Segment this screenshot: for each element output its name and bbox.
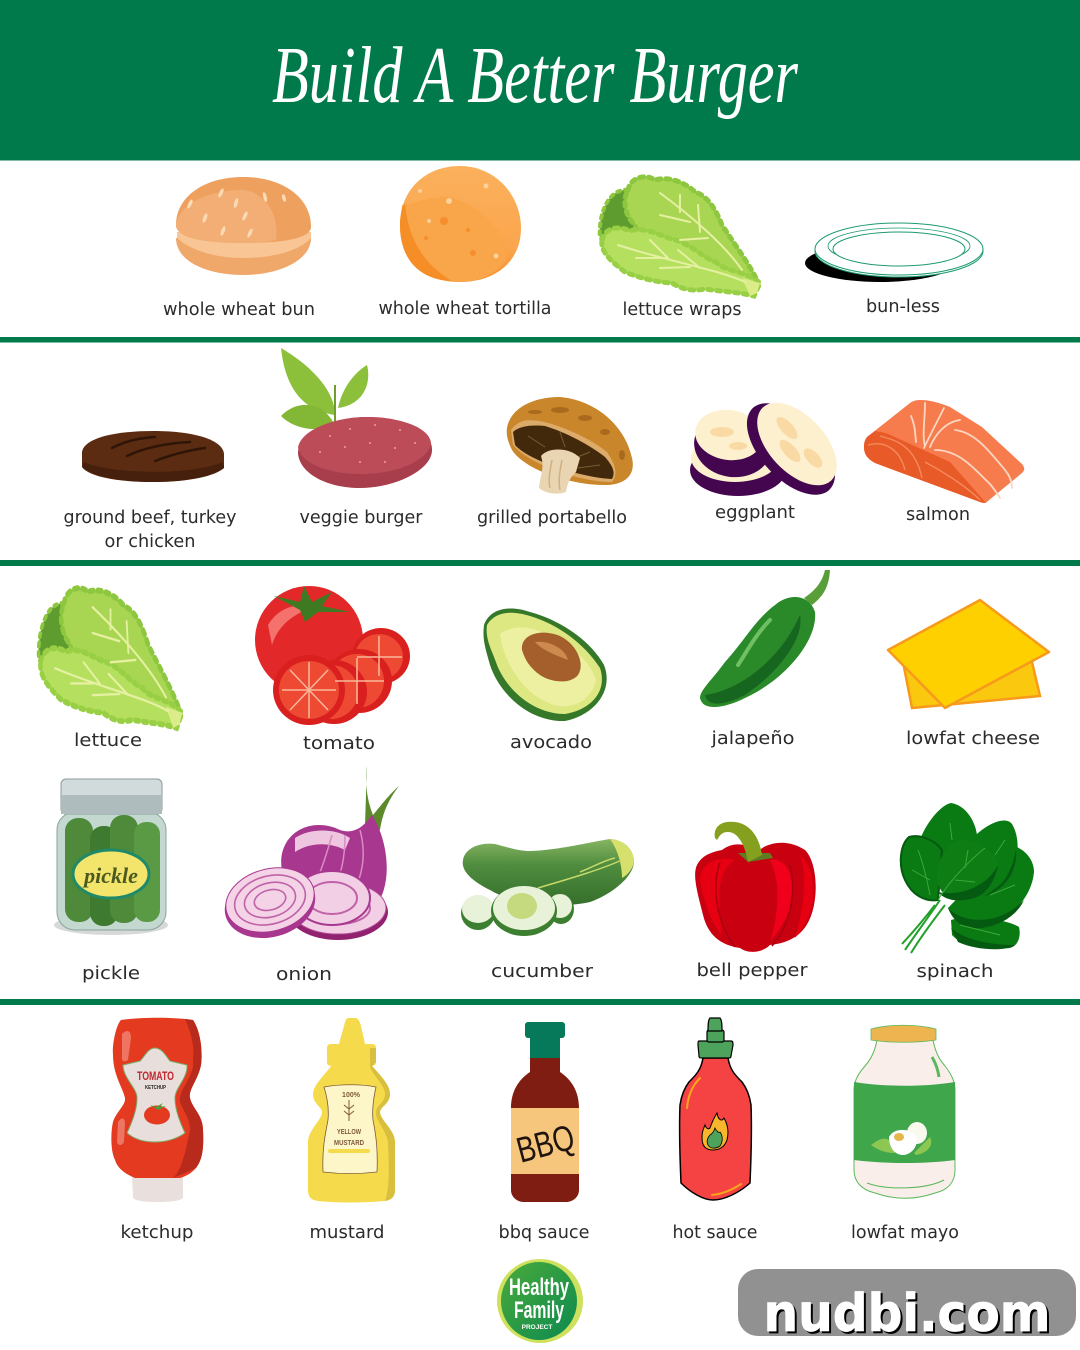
icon: pickle jar: pickle bbox=[82, 863, 138, 888]
section: bun options bbox=[163, 166, 983, 320]
section: toppings bbox=[39, 570, 1049, 985]
label: bun-less: bun-less bbox=[866, 296, 940, 317]
icon: veggie burger bbox=[281, 348, 432, 488]
icon: pickle jar bbox=[54, 779, 168, 935]
label: avocado: avocado bbox=[510, 732, 592, 753]
label: veggie burger: veggie burger bbox=[300, 507, 423, 528]
header banner bbox=[0, 0, 1080, 160]
label: bbq sauce: bbq sauce bbox=[498, 1222, 590, 1243]
icon: bbq sauce bottle bbox=[511, 1022, 579, 1202]
title: Build A Better Burger bbox=[272, 32, 799, 120]
watermark: nudbi.com: nudbi.com bbox=[766, 1286, 1052, 1346]
label: tomato: tomato bbox=[303, 733, 375, 754]
label: lowfat mayo: lowfat mayo bbox=[851, 1222, 959, 1243]
section: sauces bbox=[111, 1018, 959, 1243]
logo: Healthy Family Project: Family bbox=[514, 1297, 564, 1324]
icon: whole wheat bun bbox=[176, 177, 311, 275]
label: grilled portabello: grilled portabello bbox=[477, 507, 627, 528]
icon: spinach bbox=[901, 803, 1034, 953]
icon: lettuce bbox=[39, 588, 182, 728]
icon: lettuce wraps bbox=[600, 177, 760, 296]
section: protein options bbox=[64, 348, 1024, 552]
icon: jalapeno bbox=[700, 570, 830, 707]
icon: plate bbox=[805, 223, 983, 282]
logo: Healthy Family Project: Healthy bbox=[509, 1274, 569, 1301]
icon: onion bbox=[217, 765, 399, 948]
icon: tomato bbox=[255, 586, 410, 725]
label: cucumber: cucumber bbox=[491, 961, 594, 982]
icon: portabello mushroom bbox=[507, 397, 633, 494]
label: hot sauce: hot sauce bbox=[672, 1222, 758, 1243]
label: spinach: spinach bbox=[916, 961, 994, 982]
label: lettuce: lettuce bbox=[74, 730, 142, 751]
icon: salmon fillet bbox=[864, 400, 1024, 503]
label: eggplant: eggplant bbox=[715, 502, 795, 523]
icon: ketchup bottle: KETCHUP bbox=[145, 1085, 166, 1091]
icon: mustard bottle bbox=[308, 1018, 395, 1202]
icon: hot sauce bottle bbox=[680, 1018, 751, 1200]
label: whole wheat bun: whole wheat bun bbox=[163, 299, 315, 320]
label: ground beef, turkey or chicken: ground beef, turkey bbox=[64, 507, 237, 528]
label: pickle: pickle bbox=[82, 963, 140, 984]
icon: mustard bottle: 100% bbox=[342, 1092, 361, 1099]
icon: ketchup bottle: TOMATO bbox=[137, 1071, 174, 1083]
icon: lowfat mayo jar bbox=[854, 1025, 955, 1198]
icon: cucumber bbox=[461, 839, 634, 936]
icon: mustard bottle: YELLOW bbox=[337, 1129, 361, 1136]
label: ketchup: ketchup bbox=[120, 1222, 194, 1243]
icon: avocado bbox=[483, 608, 607, 721]
label: jalapeno: jalapeño bbox=[710, 728, 794, 749]
label: lowfat cheese: lowfat cheese bbox=[906, 728, 1040, 749]
label: ground beef, turkey or chicken: or chicken bbox=[104, 531, 196, 552]
icon: ketchup bottle bbox=[111, 1018, 203, 1202]
icon: lowfat cheese bbox=[888, 600, 1049, 708]
watermark: nudbi.com: nudbi.com bbox=[764, 1284, 1050, 1344]
label: mustard: mustard bbox=[310, 1222, 384, 1243]
logo: Healthy Family Project: PROJECT bbox=[522, 1324, 552, 1331]
icon: whole wheat tortilla bbox=[400, 166, 521, 282]
label: bell pepper: bell pepper bbox=[696, 960, 808, 981]
icon: mustard bottle: MUSTARD bbox=[334, 1140, 364, 1147]
label: ground beef, turkey or chicken bbox=[64, 507, 237, 552]
icon: bbq sauce bottle: BBQ bbox=[512, 1116, 579, 1171]
icon: eggplant slices bbox=[690, 388, 852, 510]
icon: bell pepper bbox=[695, 822, 816, 952]
label: salmon: salmon bbox=[906, 504, 970, 525]
logo: Healthy Family Project bbox=[497, 1259, 583, 1343]
label: lettuce wraps: lettuce wraps bbox=[622, 299, 742, 320]
icon: beef patty bbox=[82, 431, 224, 482]
label: onion: onion bbox=[276, 964, 332, 985]
label: whole wheat tortilla: whole wheat tortilla bbox=[378, 298, 552, 319]
